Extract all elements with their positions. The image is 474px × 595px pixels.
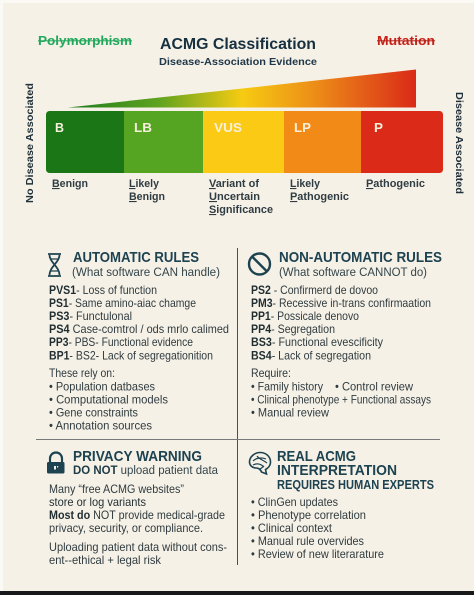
classification bar: LB bbox=[134, 120, 152, 135]
bar labels: Benign bbox=[129, 191, 165, 203]
crossed-out label: Polymorphism: Polymorphism bbox=[38, 34, 132, 48]
panel: privacy warning bbox=[47, 448, 227, 567]
rule list: PVS1- Loss of function bbox=[49, 283, 157, 297]
title: ACMG Classification bbox=[160, 36, 316, 53]
rule list: BP1- BS2- Lack of segregationition bbox=[49, 348, 213, 362]
panel: automatic rules bbox=[48, 249, 229, 432]
heading: REQUIRES HUMAN EXPERTS bbox=[277, 478, 434, 492]
requirements list: • Clinical phenotype + Functional assays bbox=[251, 392, 431, 406]
bar labels: Pathogenic bbox=[290, 191, 349, 203]
warning line: DO NOT upload patient data bbox=[73, 463, 218, 477]
data sources list: • Computational models bbox=[49, 392, 168, 406]
rule list: PP1- Possicale denovo bbox=[251, 309, 359, 323]
classification bar: LP bbox=[294, 120, 311, 135]
rule list: PS1- Same amino-aiac chamge bbox=[49, 296, 196, 310]
requirements list: • Control review bbox=[335, 380, 413, 394]
warning text: Uploading patient data without cons- bbox=[49, 540, 227, 554]
classification bar: VUS bbox=[214, 120, 242, 135]
data sources list: • Population datbases bbox=[49, 380, 155, 394]
rule list bbox=[49, 283, 229, 362]
classification bar: B bbox=[55, 120, 64, 135]
subheading: (What software CANNOT do) bbox=[279, 265, 427, 279]
data sources list: These rely on: bbox=[49, 366, 115, 380]
requirements list: • Manual review bbox=[251, 406, 329, 420]
panel: non-automatic rules bbox=[249, 249, 442, 420]
rule list: PS2 - Confirmerd de dovoo bbox=[251, 283, 378, 297]
rule list: BS4- Lack of segregation bbox=[251, 348, 371, 362]
warning text: store or log variants bbox=[49, 495, 146, 509]
expert tasks list: • Clinical context bbox=[251, 521, 333, 535]
heading: AUTOMATIC RULES bbox=[73, 249, 199, 266]
requirements list: Require: bbox=[251, 366, 291, 380]
warning text: privacy, security, or compliance. bbox=[49, 521, 203, 535]
crossed-out label: Mutation: Mutation bbox=[377, 34, 435, 48]
heading: NON-AUTOMATIC RULES bbox=[279, 249, 442, 266]
bar labels: Significance bbox=[209, 204, 273, 216]
heading bbox=[277, 448, 434, 492]
requirements list: • Family history bbox=[251, 380, 323, 394]
heading: REAL ACMG bbox=[277, 448, 356, 465]
warning text: ent--ethical + legal risk bbox=[49, 553, 161, 567]
classification bar: P bbox=[374, 120, 383, 135]
icon: padlock bbox=[47, 453, 64, 474]
panel: human experts bbox=[250, 448, 434, 561]
rule list: PS3- Functulonal bbox=[49, 309, 132, 323]
rule list: PM3- Recessive in-trans confirmaation bbox=[251, 296, 431, 310]
axis label: No Disease Associated: No Disease Associated bbox=[24, 83, 36, 203]
rule list: PP4- Segregation bbox=[251, 322, 335, 336]
rule list bbox=[251, 283, 431, 362]
bar labels: Pathogenic bbox=[366, 178, 425, 190]
icon: brain bbox=[250, 452, 270, 474]
heading: INTERPRETATION bbox=[277, 462, 397, 479]
data sources list: • Gene constraints bbox=[49, 406, 138, 420]
data sources list: • Annotation sources bbox=[49, 418, 152, 432]
requirements list bbox=[251, 366, 431, 420]
subtitle: Disease-Association Evidence bbox=[159, 56, 317, 68]
expert tasks list bbox=[251, 495, 384, 561]
warning text: Many “free ACMG websites” bbox=[49, 482, 184, 496]
expert tasks list: • Phenotype correlation bbox=[251, 508, 366, 522]
rule list: PS4 Case-comtrol / ods mrlo calimed bbox=[49, 322, 229, 336]
rule list: BS3- Functional evescificity bbox=[251, 335, 383, 349]
heading: PRIVACY WARNING bbox=[73, 448, 202, 465]
bar labels: Likely bbox=[129, 178, 160, 190]
warning text: Most do NOT provide medical-grade bbox=[49, 508, 225, 522]
icon: DNA helix bbox=[48, 254, 61, 276]
warning text bbox=[49, 482, 227, 567]
bar labels: Benign bbox=[52, 178, 88, 190]
gradient evidence wedge bbox=[68, 70, 416, 108]
axis label: Disease Associated: Disease Associated bbox=[453, 92, 465, 194]
icon: prohibited sign bbox=[249, 254, 270, 274]
classification bar bbox=[46, 111, 443, 173]
rule list: PP3- PBS- Functional evidence bbox=[49, 335, 193, 349]
expert tasks list: • Manual rule overvides bbox=[251, 534, 364, 548]
bar labels: Uncertain bbox=[209, 191, 260, 203]
expert tasks list: • Review of new literarature bbox=[251, 547, 384, 561]
bar labels bbox=[52, 178, 425, 216]
bar labels: Likely bbox=[290, 178, 321, 190]
subheading: (What software CAN handle) bbox=[72, 265, 220, 279]
bar labels: Variant of bbox=[209, 178, 259, 190]
data sources list bbox=[49, 366, 168, 432]
expert tasks list: • ClinGen updates bbox=[251, 495, 338, 509]
